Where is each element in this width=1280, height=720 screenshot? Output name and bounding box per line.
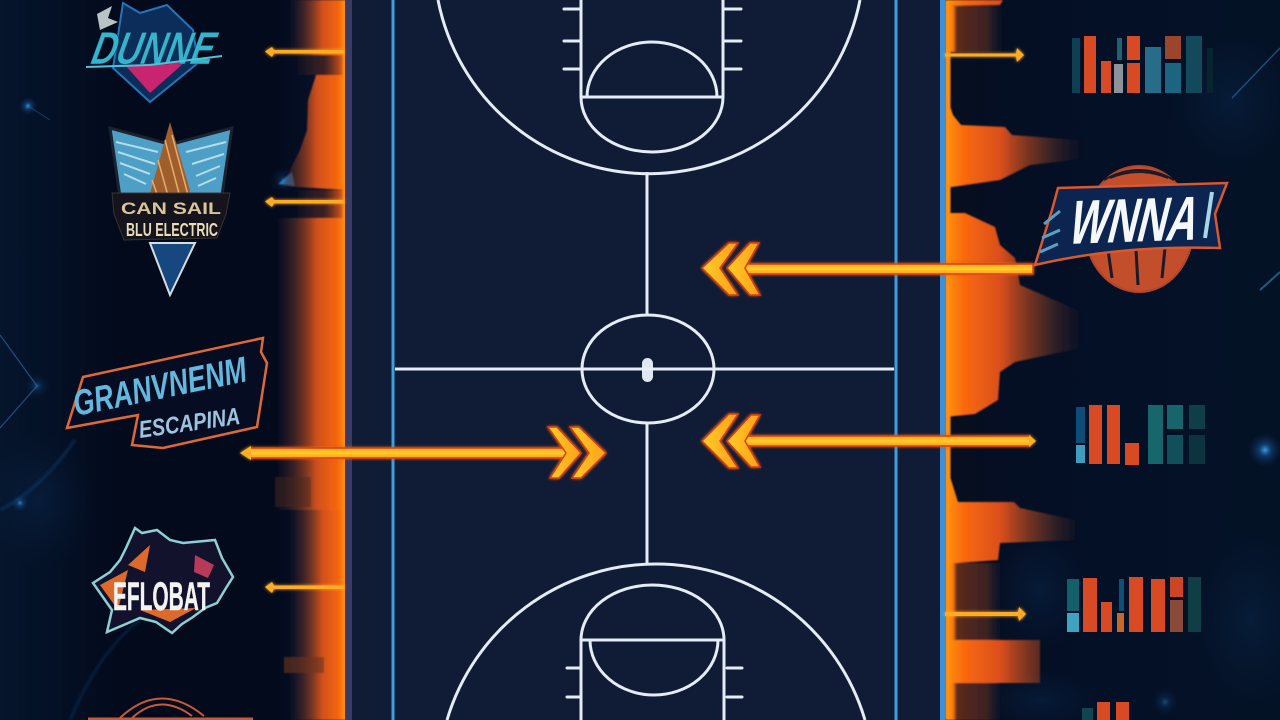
top three-point arc bbox=[438, 0, 860, 174]
badge basketball bbox=[1085, 166, 1193, 292]
left orange glow band bbox=[275, 0, 346, 720]
logo: spiky star badge bbox=[93, 528, 233, 633]
crest wordmark: DUNNE bbox=[84, 23, 225, 75]
logo: shield crest: CAN SAIL bbox=[121, 199, 221, 218]
right orange glow band bbox=[945, 0, 1095, 720]
arrow: left logo to court bbox=[240, 427, 606, 478]
logo: wide orange outlined badge: GRANVNENM bbox=[69, 348, 251, 424]
crest pink gem bbox=[125, 62, 185, 93]
logo: shield crest bbox=[110, 122, 232, 295]
bottom free-throw circle bbox=[581, 585, 724, 695]
bottom lane ticks bbox=[567, 668, 742, 697]
badge banner bbox=[1035, 183, 1227, 265]
logo: wide orange outlined badge bbox=[67, 338, 267, 448]
bar chart: top right bbox=[1072, 36, 1213, 93]
top key bbox=[581, 0, 723, 97]
logo: wide orange outlined badge: ESCAPINA bbox=[137, 403, 242, 444]
shield banner bbox=[112, 193, 230, 240]
logo: shield crest: BLU ELECTRIC bbox=[126, 220, 218, 240]
court boundary strips bbox=[345, 0, 945, 720]
court sidelines bbox=[392, 0, 898, 720]
court markings bbox=[395, 0, 894, 720]
bottom three-point arc bbox=[447, 564, 865, 720]
logo: WNNA basketball badge bbox=[1035, 166, 1227, 292]
top free-throw circle bbox=[581, 42, 723, 152]
court surface bbox=[345, 0, 945, 720]
badge wordmark: WNNA bbox=[1063, 184, 1208, 258]
top lane ticks bbox=[564, 9, 741, 69]
small arrows on the right bbox=[945, 48, 1026, 621]
logo: bottom cropped badge bbox=[88, 698, 253, 719]
bottom key bbox=[581, 640, 724, 720]
logo: spiky star badge: EFLOBAT bbox=[113, 575, 210, 619]
background: left side panel bbox=[0, 0, 345, 720]
half court horizontal line bbox=[395, 368, 894, 370]
arrow: WNNA logo to court bbox=[702, 243, 1033, 295]
bar chart: middle right bbox=[1076, 405, 1205, 465]
small arrows on the left bbox=[265, 47, 344, 593]
center circle bbox=[582, 315, 714, 423]
bar chart: bottom right cropped bbox=[1082, 702, 1129, 720]
shield wings bbox=[110, 128, 232, 197]
arrow: bar chart to court bbox=[702, 414, 1036, 468]
shield point bbox=[150, 243, 195, 295]
logo: top left team crest bbox=[84, 3, 225, 102]
half court vertical line bbox=[646, 172, 648, 563]
bar chart: lower right bbox=[1067, 577, 1201, 632]
crest corner scribble bbox=[97, 6, 118, 30]
background: right side panel bbox=[945, 0, 1280, 720]
shield sail bbox=[146, 122, 190, 218]
center dot bbox=[640, 358, 655, 382]
